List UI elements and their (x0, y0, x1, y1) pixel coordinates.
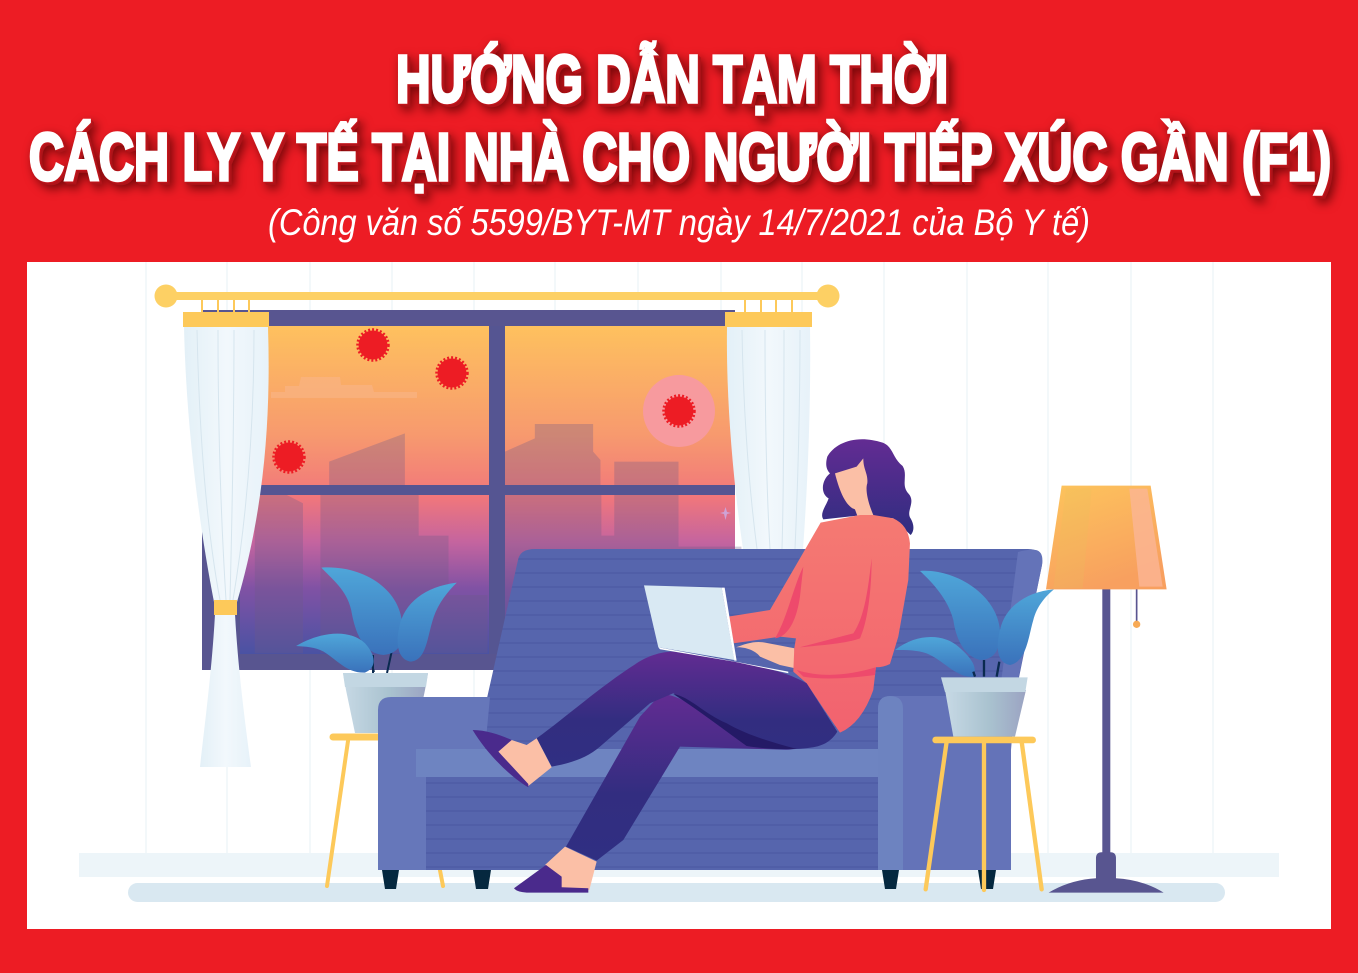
sofa left arm (378, 697, 490, 870)
sofa back (485, 549, 1042, 750)
right plant leaves (895, 571, 1054, 677)
hand (736, 642, 795, 668)
sofa (378, 549, 1042, 889)
back leg (566, 694, 793, 861)
sofa legs (382, 870, 996, 889)
window (202, 310, 741, 670)
subtitle: (Công văn số 5599/BYT-MT ngày 14/7/2021 của Bộ Y tế) (268, 202, 1090, 243)
floor (79, 853, 1279, 902)
woman with laptop (473, 439, 913, 893)
right curtain (725, 312, 812, 549)
title: HƯỚNG DẪN TẠM THỜI (396, 42, 948, 117)
sofa base (426, 777, 878, 870)
sweater folds (775, 558, 876, 678)
panel: room illustration (27, 262, 1331, 929)
left side table (327, 737, 443, 886)
leg shadow (673, 694, 797, 749)
sofa right wing (1000, 550, 1042, 690)
right plant stems (973, 660, 999, 677)
virus particles (274, 330, 694, 472)
cloud (271, 377, 417, 398)
city buildings (255, 424, 741, 653)
hair (822, 439, 913, 535)
sun (643, 375, 715, 447)
lower slipper (514, 865, 588, 893)
sparkle (720, 507, 731, 520)
right side table and plant (895, 486, 1167, 893)
right pot (941, 677, 1028, 737)
laptop (644, 585, 788, 673)
front leg (537, 652, 837, 767)
lower foot (545, 847, 597, 890)
title (29, 42, 1331, 195)
sweater (728, 515, 910, 733)
floor lamp (1046, 486, 1167, 893)
right table (926, 740, 1042, 890)
left plant (296, 567, 457, 733)
sofa seat (416, 749, 878, 777)
raised foot (498, 738, 552, 786)
face (835, 458, 873, 518)
raised slipper (473, 730, 528, 787)
window bars (240, 326, 735, 654)
left curtain (183, 312, 269, 767)
sofa right arm (878, 696, 1011, 870)
curtain rod (154, 284, 840, 312)
